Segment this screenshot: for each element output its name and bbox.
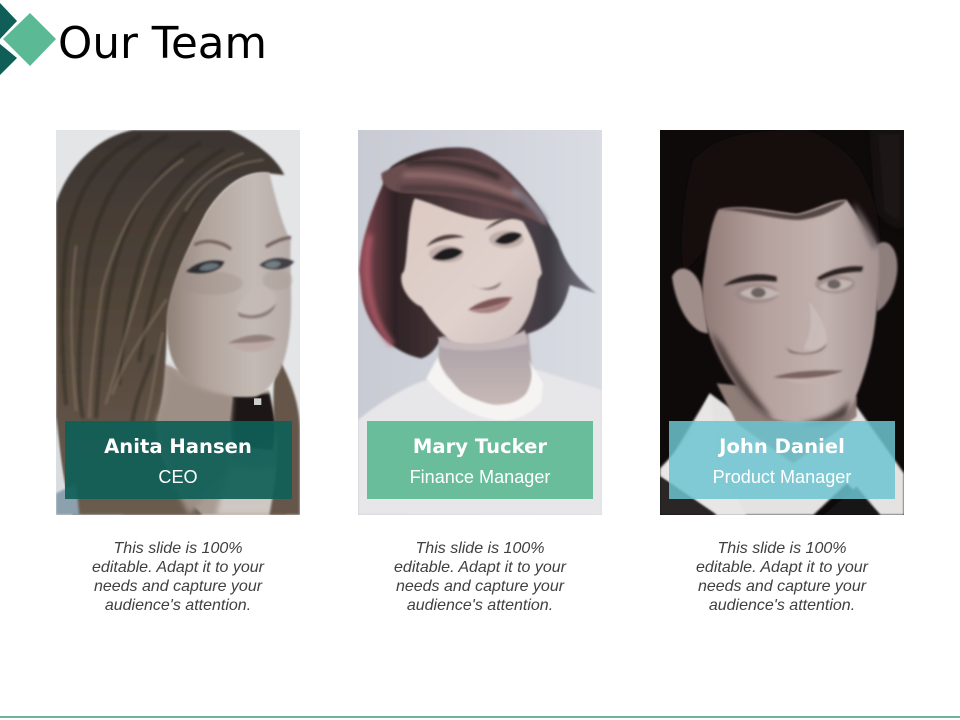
name: Mary Tucker: Mary Tucker — [413, 435, 547, 458]
ears — [672, 269, 708, 333]
footer line — [0, 716, 960, 718]
label panel: Anita Hansen — [65, 421, 292, 499]
earring — [254, 398, 261, 405]
description 1: needs and capture your — [94, 578, 262, 595]
label panel: Mary Tucker — [367, 421, 593, 499]
role: Product Manager: Product Manager — [713, 467, 851, 487]
icon: diamonds logo — [0, 3, 56, 75]
role: Finance Manager: Finance Manager — [410, 467, 550, 487]
role: CEO: CEO — [158, 467, 198, 487]
description 1 — [92, 540, 264, 614]
description 2: audience's attention. — [407, 597, 553, 614]
description 3: editable. Adapt it to your — [696, 559, 868, 576]
name: John Daniel: John Daniel — [719, 435, 845, 458]
description 1: editable. Adapt it to your — [92, 559, 264, 576]
photo: Mary Tucker — [358, 130, 602, 515]
description 2 — [394, 540, 566, 614]
description 3: needs and capture your — [698, 578, 866, 595]
description 2: This slide is 100% — [416, 540, 544, 557]
label panel: John Daniel — [669, 421, 895, 499]
description 1: audience's attention. — [105, 597, 251, 614]
description 3: audience's attention. — [709, 597, 855, 614]
description 2: needs and capture your — [396, 578, 564, 595]
photo: John Daniel — [660, 130, 904, 515]
photo: Anita Hansen — [56, 130, 300, 515]
description 2: editable. Adapt it to your — [394, 559, 566, 576]
hair streaks — [62, 137, 263, 420]
name: Anita Hansen: Anita Hansen — [104, 435, 252, 458]
description 1: This slide is 100% — [114, 540, 242, 557]
title: Our Team — [58, 19, 267, 69]
description 3: This slide is 100% — [718, 540, 846, 557]
description 3 — [696, 540, 868, 614]
